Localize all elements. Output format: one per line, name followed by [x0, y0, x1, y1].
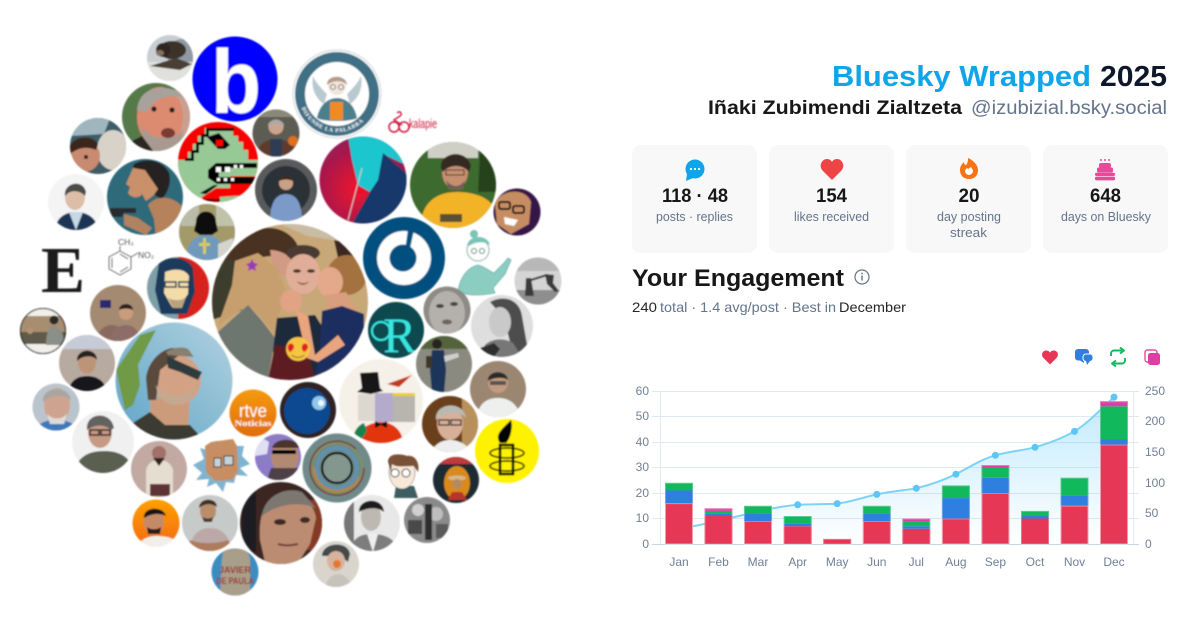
avatar: man in round tunnel [255, 159, 317, 222]
avatar: smiling man with glasses [493, 188, 541, 236]
avatar: man on orange background [132, 499, 181, 548]
panel: posts and replies stat [632, 145, 757, 253]
likes bars [665, 445, 1128, 544]
avatar: toluene chemistry diagram: CH₃ [118, 237, 134, 247]
avatar: grey baby face [423, 286, 471, 335]
y axis labels right: 200 [1145, 414, 1165, 428]
panel: days on Bluesky stat: 648 [1090, 186, 1121, 207]
y axis labels right: 50 [1145, 506, 1159, 520]
panel: day posting streak stat [906, 145, 1031, 253]
chart: monthly engagement stacked bars with cumulative line [636, 384, 1165, 569]
panel: posts and replies stat: posts · replies [656, 210, 733, 224]
icon: likes [1042, 350, 1058, 364]
avatar: cartoon boy with glasses [388, 454, 418, 498]
avatar: woman with gun painting [107, 159, 184, 239]
y axis labels left: 40 [636, 435, 649, 449]
quotes bars [704, 401, 1128, 521]
month labels: Oct [1026, 555, 1045, 569]
bar highlight strokes [666, 402, 1128, 544]
y axis labels right: 100 [1145, 476, 1165, 490]
engagement summary: December [839, 299, 906, 315]
avatar: cartoon head with sunglasses [193, 439, 250, 492]
icon: chat bubble [686, 160, 704, 181]
avatar: woman with orange [313, 541, 359, 588]
avatar: black and white woman [471, 295, 533, 359]
month labels: Sep [985, 555, 1006, 569]
title: Bluesky Wrapped [832, 61, 1091, 93]
engagement summary: total · 1.4 avg/post · Best in [660, 299, 836, 315]
user name and handle: Iñaki Zubimendi Zialtzeta [708, 98, 962, 119]
avatar: man in navy suit [48, 174, 104, 232]
avatar: concentric colored rings [302, 434, 372, 502]
avatar: darth vader at laptop [179, 204, 235, 262]
icon: heart [821, 159, 843, 180]
avatar: man in car [68, 118, 129, 174]
avatar: Javier de Paula [211, 548, 259, 596]
reposts bars [665, 406, 1128, 526]
avatar: cyan and red portrait [319, 136, 408, 224]
y axis labels right: 150 [1145, 445, 1165, 459]
month labels: Feb [708, 555, 729, 569]
month labels: Dec [1103, 555, 1125, 569]
line points [794, 394, 1118, 508]
avatar: Amnesty International candle [475, 419, 539, 483]
icon: reposts [1111, 348, 1125, 366]
avatar: blue b logo [192, 33, 278, 133]
avatar: Javier de Paula: DE PAULA [216, 576, 254, 587]
avatar: man with sunglasses against sky [115, 322, 233, 445]
avatar: green pixel dinosaur [177, 120, 259, 204]
avatar: men at meeting [90, 285, 146, 345]
user name and handle: @izubizial.bsky.social [971, 98, 1167, 119]
panel: day posting streak stat: streak [950, 226, 988, 240]
cumulative line [679, 397, 1114, 529]
icon: quotes [1145, 350, 1160, 365]
cumulative area [679, 397, 1114, 544]
avatar: man with deal-with-it sunglasses [255, 434, 301, 480]
heading: your engagement: Your Engagement [632, 265, 844, 292]
month labels: Jul [909, 555, 924, 569]
icon: flame [960, 158, 978, 179]
avatar: family group photo [208, 224, 368, 380]
engagement summary [632, 299, 906, 315]
avatar: blue orb [280, 382, 336, 438]
avatar: blue b logo: b [211, 33, 261, 133]
avatar: RTVE Noticias logo [230, 390, 276, 436]
avatar: Javier de Paula: JAVIER [219, 565, 251, 576]
y axis labels left: 10 [636, 511, 649, 525]
y axis labels right: 250 [1145, 384, 1165, 398]
avatar: man in black T-shirt [59, 335, 115, 392]
avatar: white-haired man in blue shirt [32, 383, 80, 434]
month labels: Mar [748, 555, 768, 569]
panel: posts and replies stat: 118 · 48 [662, 186, 728, 207]
avatar: teal letter R [368, 302, 424, 363]
avatar: collage hat and newspapers [339, 359, 423, 443]
avatar: man with grey beard [122, 83, 190, 153]
avatar: older man close-up [240, 482, 322, 566]
avatar: E logo: E [41, 234, 85, 307]
logo: kalapie [389, 112, 437, 132]
y axis labels left: 0 [642, 537, 649, 551]
avatar: person standing in field [416, 336, 472, 394]
month labels: Apr [788, 555, 807, 569]
month labels: Aug [945, 555, 967, 569]
panel: likes received stat: 154 [816, 186, 847, 207]
month labels: May [826, 555, 849, 569]
avatar: masked cowboy [433, 457, 479, 503]
replies bars [665, 440, 1128, 529]
panel: avatar bubble cluster [18, 33, 562, 596]
panel: days on Bluesky stat [1043, 145, 1168, 253]
chart legend [1042, 348, 1160, 366]
month labels: Jan [669, 555, 689, 569]
icon: replies [1075, 349, 1093, 365]
avatar: vintage child photo [131, 441, 187, 497]
user name and handle [708, 98, 1167, 119]
avatar: teal drawn woman waving [458, 230, 511, 295]
y axis labels left: 20 [636, 486, 649, 500]
avatar: man in patterned shirt [470, 361, 526, 420]
y axis labels left [636, 384, 649, 551]
avatar: chimpanzee [147, 35, 197, 81]
y axis labels right: 0 [1145, 537, 1152, 551]
panel: likes received stat: likes received [794, 210, 869, 224]
engagement summary: 240 [632, 299, 657, 315]
avatar: man in black and white suit [344, 495, 400, 552]
avatar: grey-haired man in jacket [252, 109, 300, 160]
avatar: RTVE Noticias logo: Noticias [234, 418, 272, 428]
avatar: toluene chemistry diagram [109, 237, 154, 275]
avatar: group of people in greyscale [404, 497, 450, 543]
avatar: grey-haired man portrait [422, 396, 478, 454]
icon: heart-eyes emoji [286, 337, 310, 361]
avatar: blue ring logo [363, 217, 445, 299]
avatar: Difunde la Palabra badge: DIFUNDE LA PALABRA [300, 106, 364, 134]
avatar: man with glasses in grey-green shirt [72, 411, 134, 475]
avatar: black and white child swing [514, 257, 562, 305]
y axis labels right [1145, 384, 1165, 551]
icon: cake [1095, 159, 1115, 180]
avatar: hope-style poster portrait [147, 257, 209, 319]
avatar: Difunde la Palabra badge [292, 49, 382, 139]
avatar: RTVE Noticias logo: rtve [239, 401, 267, 421]
icon: info [855, 270, 869, 284]
month labels [669, 555, 1125, 569]
panel: days on Bluesky stat: days on Bluesky [1061, 210, 1152, 224]
avatar: man with arms crossed [182, 495, 238, 552]
y axis labels left: 30 [636, 460, 649, 474]
logo: kalapie: kalapie [409, 116, 437, 131]
panel: likes received stat [769, 145, 894, 253]
y axis labels left: 60 [636, 384, 649, 398]
avatar: toluene chemistry diagram: NO₂ [138, 250, 154, 260]
month labels: Jun [867, 555, 886, 569]
avatar: teal letter R: R [383, 307, 417, 363]
y axis labels left: 50 [636, 409, 649, 423]
avatar: outlined circle with river [20, 308, 66, 354]
title: 2025 [1100, 61, 1167, 93]
avatar: man in yellow T-shirt [410, 142, 496, 228]
panel: day posting streak stat: 20 [958, 186, 980, 207]
panel: day posting streak stat: day posting [937, 210, 1001, 224]
month labels: Nov [1064, 555, 1085, 569]
